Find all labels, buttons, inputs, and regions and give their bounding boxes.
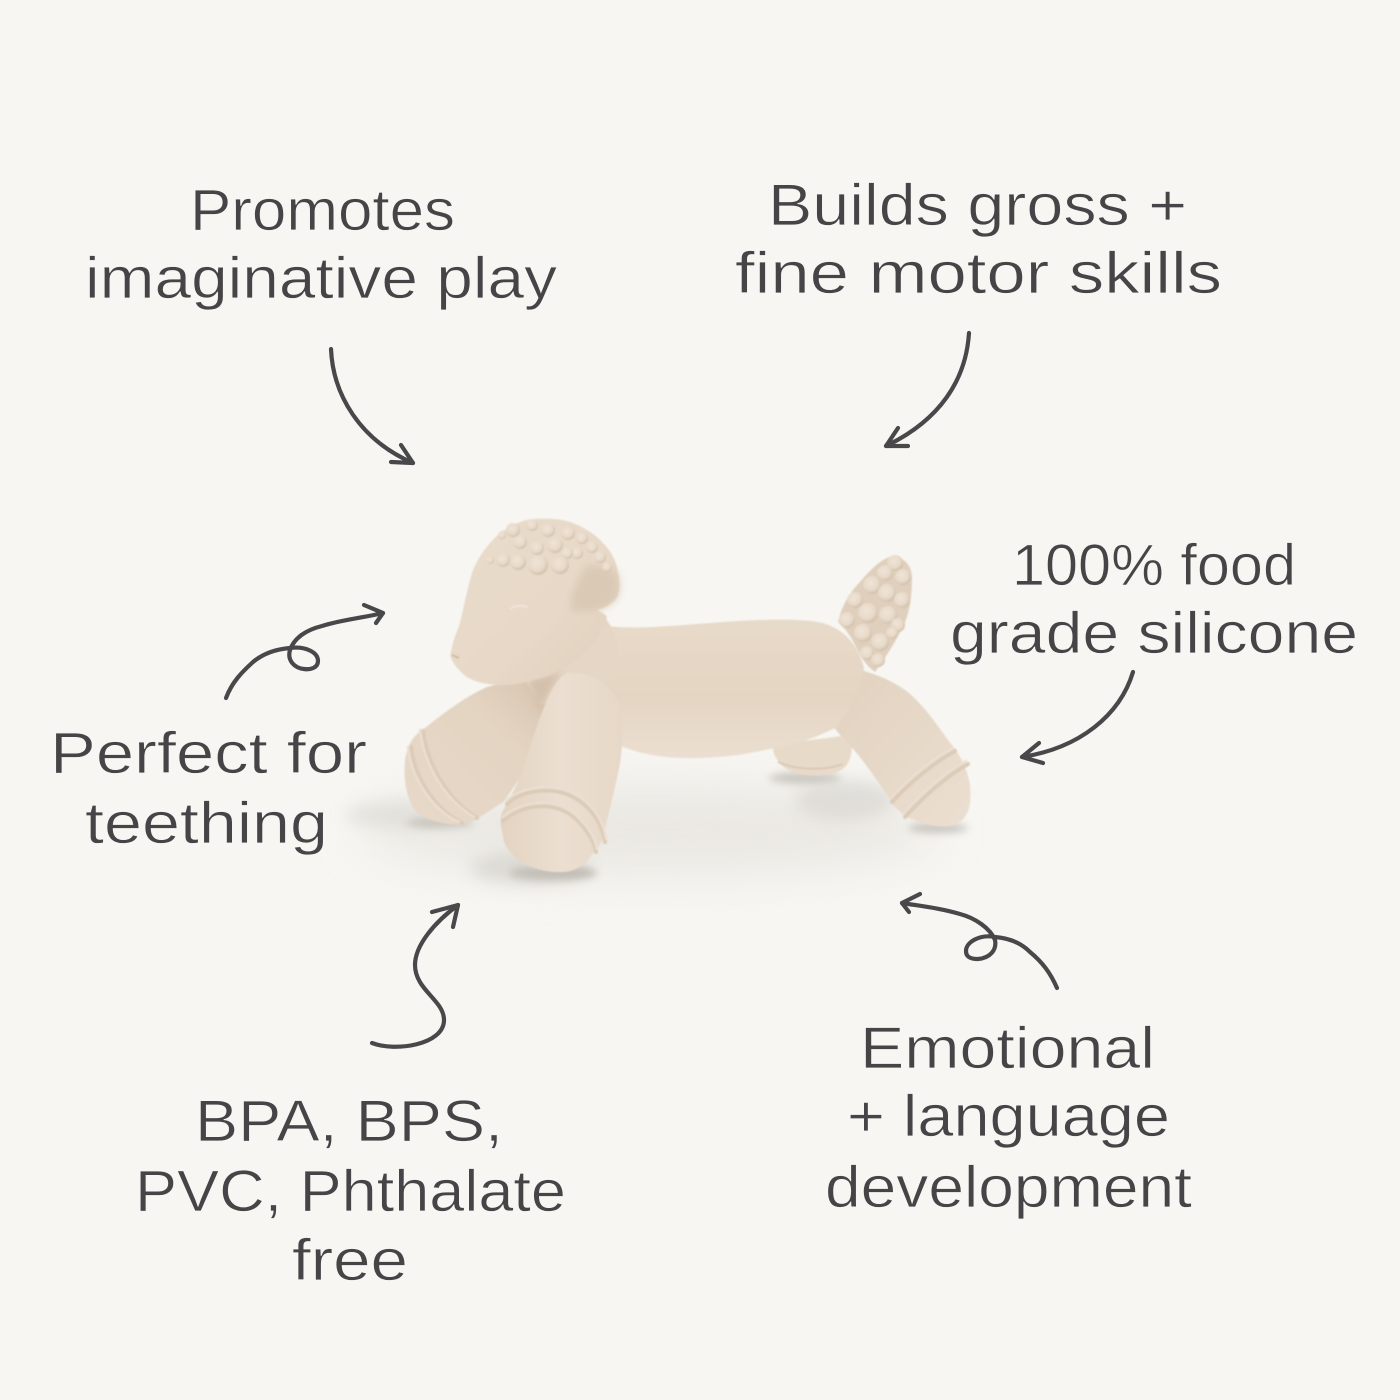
text: emotional and language development (825, 1016, 1192, 1220)
text: emotional and language development: Emotional (860, 1016, 1155, 1081)
text: BPA BPS PVC Phthalate free (135, 1089, 566, 1293)
left front leg (405, 682, 560, 824)
text: promotes imaginative play (85, 178, 557, 311)
text: promotes imaginative play: imaginative play (85, 246, 557, 311)
text: BPA BPS PVC Phthalate free: BPA, BPS, (195, 1089, 503, 1154)
arrow: looped from emotional development (902, 894, 1057, 988)
hind leg (828, 670, 970, 826)
text: builds gross and fine motor skills (735, 173, 1222, 306)
text: BPA BPS PVC Phthalate free: free (292, 1228, 408, 1293)
text: 100% food grade silicone: grade silicone (950, 601, 1358, 666)
arrow: from food grade silicone (1022, 672, 1133, 763)
ground shadow (345, 772, 968, 884)
text: perfect for teething: teething (85, 791, 328, 856)
head (450, 519, 619, 685)
text: 100% food grade silicone (950, 533, 1358, 666)
neck shadow (528, 670, 562, 715)
eye (510, 606, 527, 609)
text: builds gross and fine motor skills: fine motor skills (735, 241, 1222, 306)
text: BPA BPS PVC Phthalate free: PVC, Phthalate (135, 1159, 566, 1224)
arrow: looped from perfect for teething (226, 605, 383, 698)
nose (452, 655, 459, 658)
text: promotes imaginative play: Promotes (190, 178, 455, 243)
wool (486, 519, 612, 575)
body (594, 620, 864, 758)
text: emotional and language development: + language (847, 1084, 1170, 1149)
front center leg (501, 673, 622, 872)
tail (838, 555, 912, 672)
arrow: from builds motor skills (886, 333, 969, 446)
arrow: squiggle from BPA free (372, 905, 458, 1047)
text: perfect for teething (50, 721, 367, 856)
text: builds gross and fine motor skills: Builds gross + (768, 173, 1187, 238)
text: 100% food grade silicone: 100% food (1012, 533, 1296, 598)
ear (570, 565, 619, 612)
text: perfect for teething: Perfect for (50, 721, 367, 786)
product: silicone lamb teether (345, 519, 970, 884)
text: emotional and language development: development (825, 1155, 1192, 1220)
neck (525, 620, 618, 705)
back foot (772, 735, 852, 775)
arrow: from promotes imaginative play (331, 349, 413, 463)
